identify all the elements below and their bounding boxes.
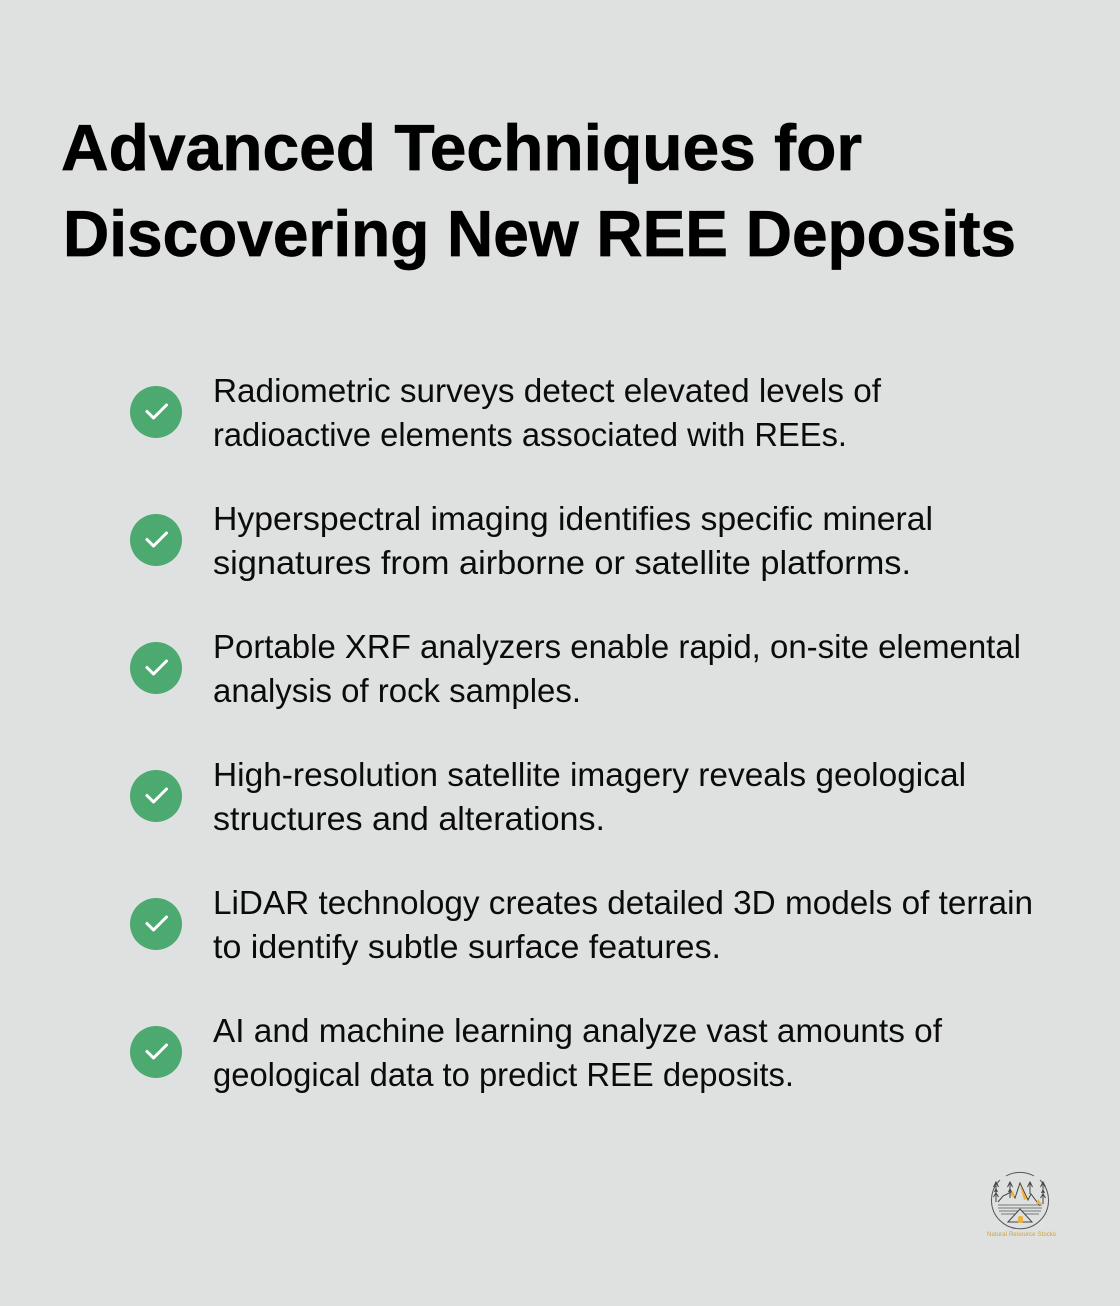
title [61, 111, 1016, 270]
logo water lines [998, 1205, 1042, 1214]
item 3: portable XRF analyzers [130, 628, 1021, 709]
item 2: hyperspectral imaging: Hyperspectral imaging identifies specific mineral [213, 500, 933, 537]
title: Discovering New REE Deposits [63, 197, 1016, 270]
logo: Natural Resource Stocks [987, 1172, 1056, 1238]
logo ring [992, 1172, 1048, 1229]
item 4: satellite imagery: structures and alterations. [213, 800, 605, 837]
logo trees [994, 1182, 1046, 1204]
item 3: portable XRF analyzers: Portable XRF analyzers enable rapid, on-site elemental [213, 628, 1021, 665]
item 2: hyperspectral imaging: signatures from airborne or satellite platforms. [213, 544, 911, 581]
title: Advanced Techniques for [61, 111, 862, 184]
item 4: satellite imagery: High-resolution satellite imagery reveals geological [213, 756, 966, 793]
item 6: AI and machine learning: AI and machine learning analyze vast amounts of [213, 1012, 943, 1049]
logo mountains [998, 1183, 1040, 1206]
item 5: LiDAR technology [130, 884, 1033, 965]
logo wordmark: Natural Resource Stocks [987, 1232, 1056, 1238]
item 4: satellite imagery [130, 756, 966, 837]
item 6: AI and machine learning: geological data to predict REE deposits. [213, 1056, 794, 1093]
item 1: radiometric surveys [130, 372, 882, 453]
checklist [130, 372, 1033, 1093]
logo tent [1008, 1209, 1032, 1222]
item 1: radiometric surveys: Radiometric surveys detect elevated levels of [213, 372, 882, 409]
item 5: LiDAR technology: to identify subtle surface features. [213, 928, 721, 965]
item 3: portable XRF analyzers: analysis of rock samples. [213, 672, 581, 709]
item 5: LiDAR technology: LiDAR technology creates detailed 3D models of terrain [213, 884, 1033, 921]
item 2: hyperspectral imaging [130, 500, 933, 581]
item 1: radiometric surveys: radioactive elements associated with REEs. [213, 416, 847, 453]
item 6: AI and machine learning [130, 1012, 943, 1093]
